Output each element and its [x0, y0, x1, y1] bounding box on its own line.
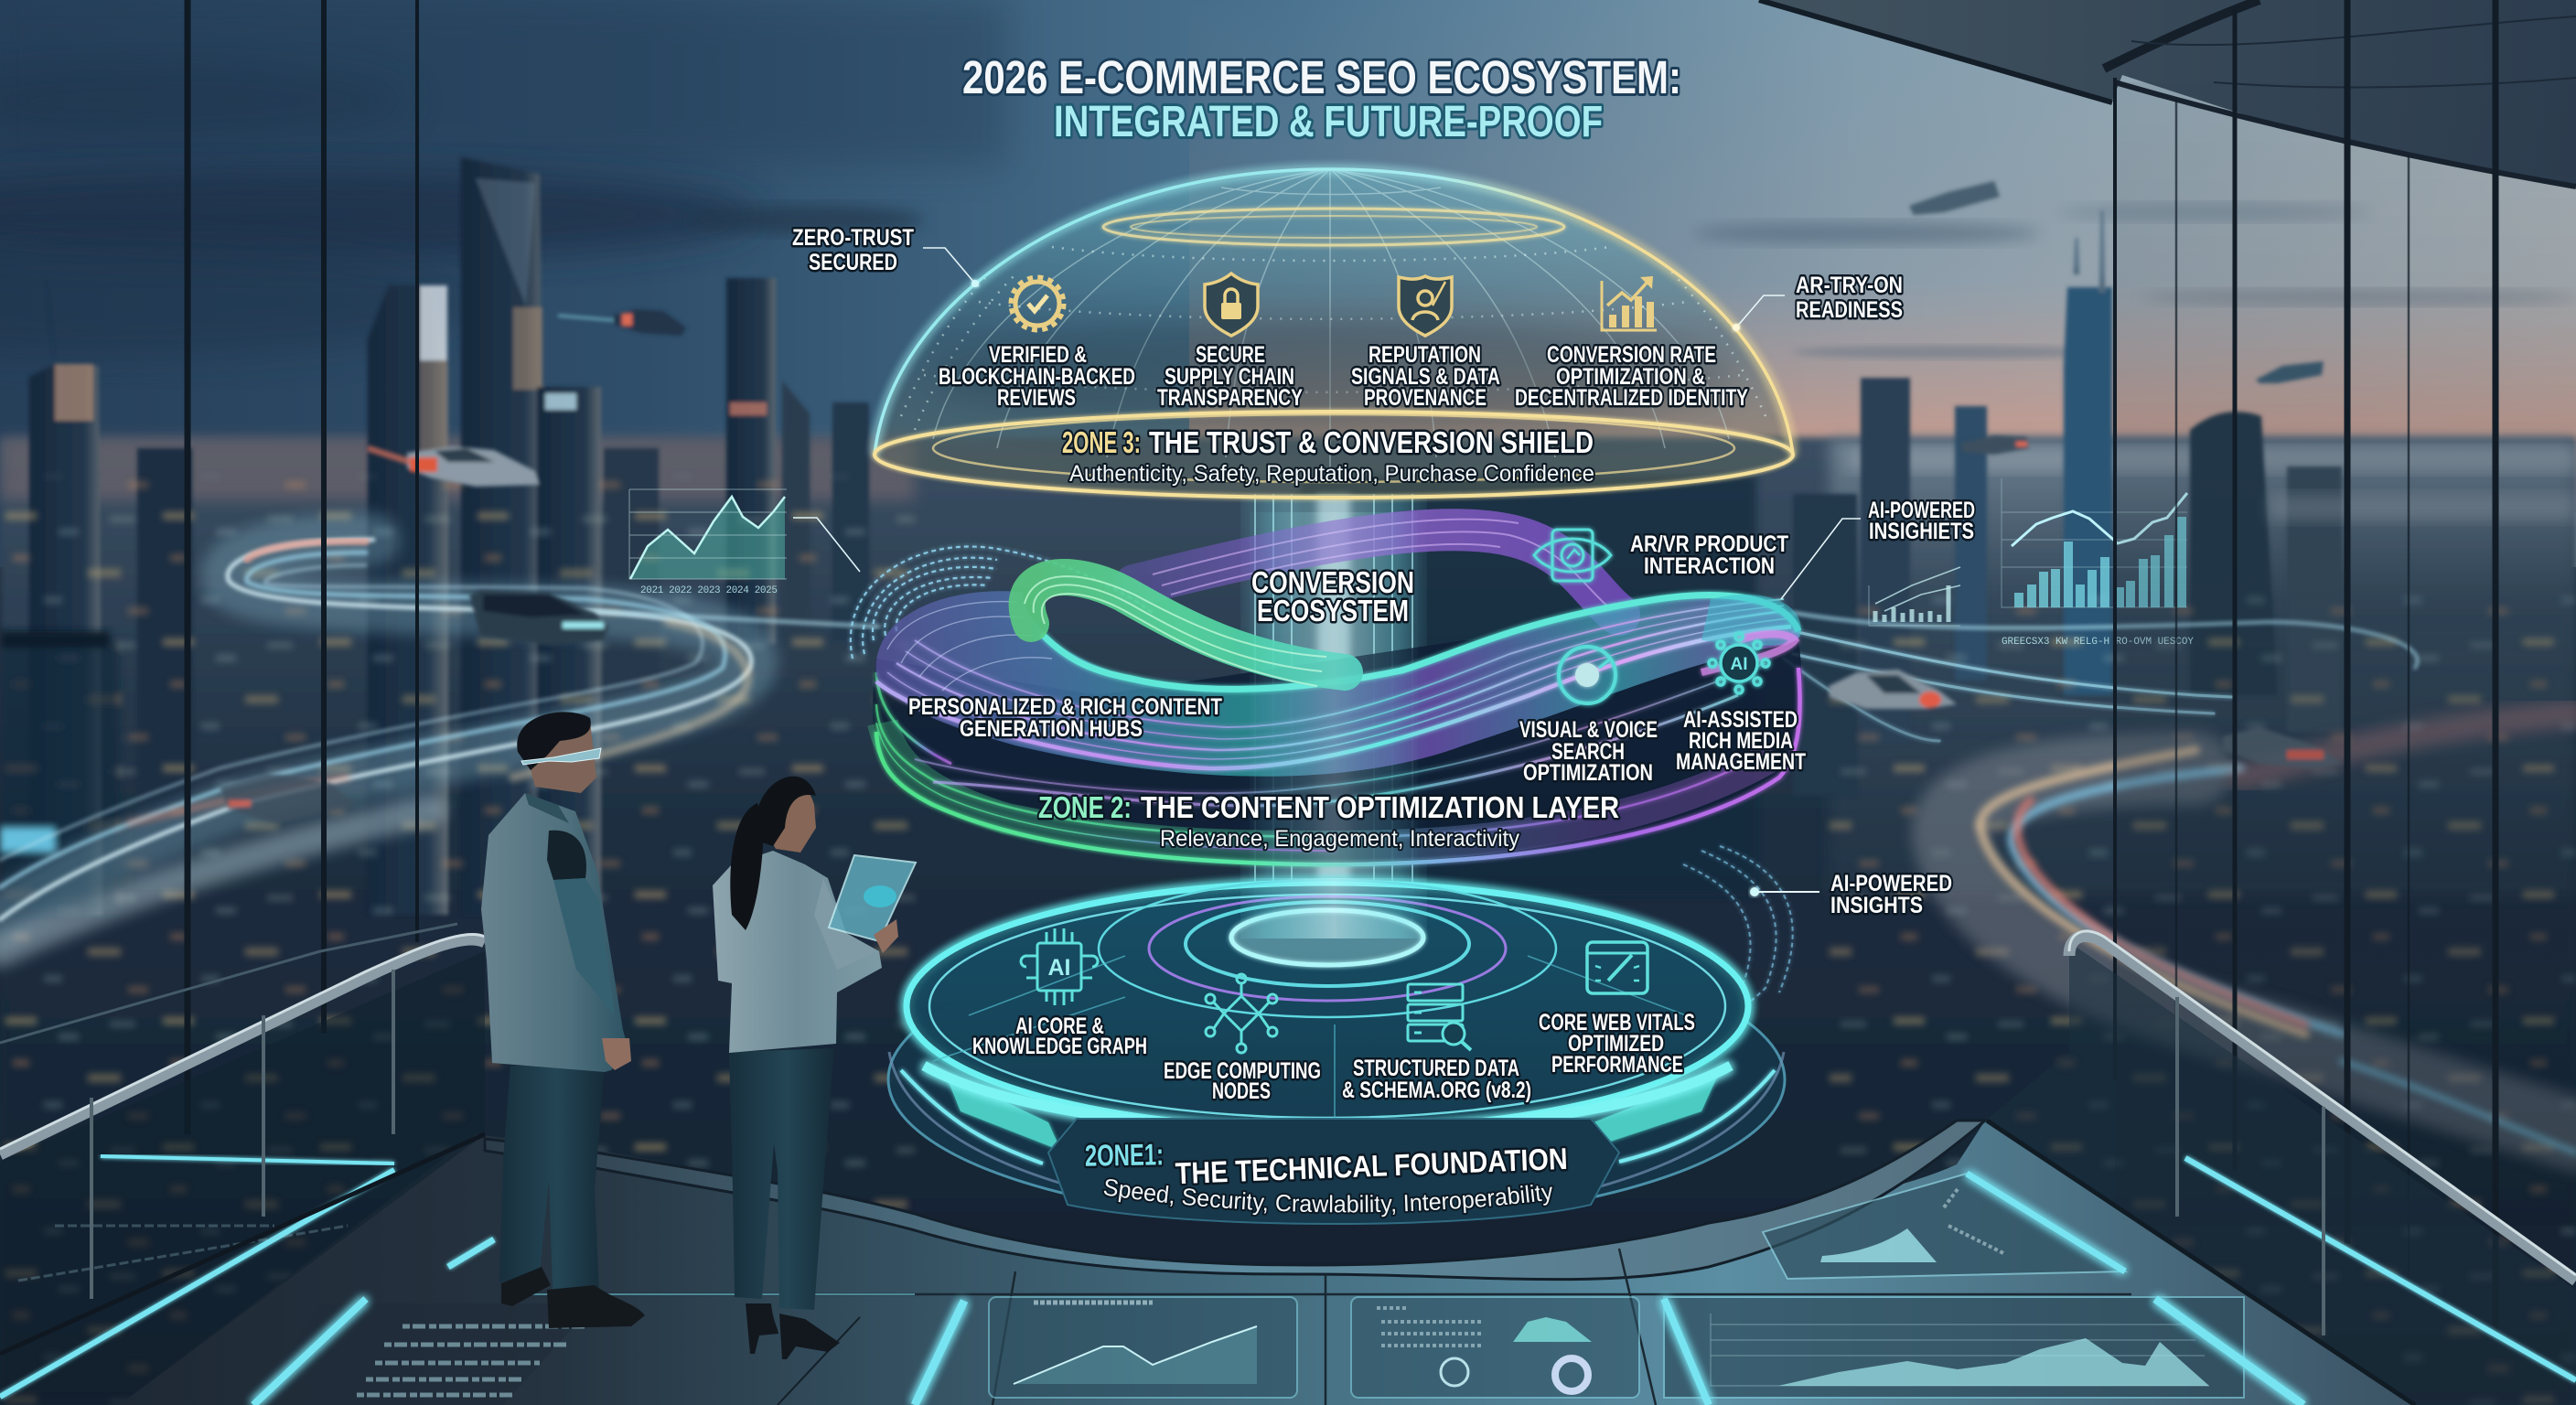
label: AI core: KNOWLEDGE GRAPH	[972, 1034, 1147, 1059]
label: reputation signals: PROVENANCE	[1364, 385, 1487, 411]
label: structured data: & SCHEMA.ORG (v8.2)	[1342, 1078, 1531, 1103]
icon: conversion chart	[1602, 276, 1657, 330]
callout: AI-powered insights: AI-POWERED	[1830, 871, 1952, 896]
icon: reputation shield	[1399, 276, 1452, 336]
label: secure supply chain	[1157, 342, 1303, 411]
floor: curved bezel	[485, 1121, 1985, 1280]
woman: ponytail	[730, 803, 764, 930]
label: reputation signals: SIGNALS & DATA	[1351, 364, 1500, 390]
label: personalized content hubs: PERSONALIZED & RICH CONTENT	[908, 694, 1222, 720]
label: edge computing: NODES	[1212, 1078, 1271, 1104]
woman: jacket	[713, 851, 882, 1053]
label: secure supply chain: SECURE	[1196, 342, 1265, 368]
callout: AI-powered insighiets: INSIGHIETS	[1869, 519, 1974, 544]
label: reputation signals	[1351, 342, 1500, 411]
label: visual and voice search: VISUAL & VOICE	[1519, 717, 1658, 743]
callout: AI-powered insighiets: AI-POWERED	[1868, 498, 1975, 523]
floor	[119, 1121, 2415, 1405]
central light beam	[1240, 494, 1427, 924]
floor: left data panel	[253, 1239, 964, 1405]
label: AR/VR product interaction: INTERACTION	[1644, 553, 1775, 579]
dome grid lines	[933, 169, 1729, 476]
woman: legs	[729, 1048, 834, 1310]
chart: right floating bar and line chart: GREECSX3 KW RELG-H RO-OVM UESCOY	[2002, 637, 2194, 648]
woman: heels	[746, 1303, 840, 1359]
ribbon: right end cap	[1701, 595, 1801, 646]
dome outline glow	[875, 169, 1793, 455]
platform: front bright rim	[924, 1066, 1731, 1132]
label: conversion rate: DECENTRALIZED IDENTITY	[1515, 385, 1748, 411]
zone 2 heading: ZONE 2:	[1038, 790, 1132, 824]
label: AI core: AI CORE &	[1015, 1014, 1104, 1039]
callout: AR try-on readiness: AR-TRY-ON	[1796, 273, 1903, 298]
platform: inner rings	[933, 880, 1686, 1127]
ribbon: back purple band	[1134, 530, 1619, 615]
floor: chart panel 1	[989, 1297, 1297, 1398]
callout: zero-trust secured: SECURED	[809, 250, 897, 275]
woman: head	[761, 785, 816, 853]
ceiling soffit: top right	[1759, 0, 2576, 187]
right dotted spiral	[1674, 846, 1793, 1034]
ribbon: left dotted swirl	[851, 547, 1153, 659]
zone 1: technical foundation platform	[887, 873, 1786, 1225]
dome base ring	[875, 412, 1793, 498]
chart: right floating bar and line chart	[1869, 478, 2194, 648]
label: personalized content hubs: GENERATION HUBS	[960, 716, 1143, 742]
callout: zero-trust secured: ZERO-TRUST	[792, 225, 914, 251]
icon: AI sun gear: AI	[1731, 655, 1747, 674]
zone 2 heading: Relevance, Engagement, Interactivity	[1160, 826, 1519, 852]
tablet	[829, 855, 916, 941]
label: personalized content hubs	[908, 694, 1222, 742]
label: edge computing: EDGE COMPUTING	[1164, 1058, 1321, 1084]
zone 3 heading	[1062, 425, 1594, 487]
background: dusk sky	[0, 0, 2576, 567]
icon: core web vitals gauge	[1587, 942, 1648, 993]
beam front veil	[1250, 512, 1418, 878]
floor: chart panel 2	[1351, 1297, 1639, 1398]
label: core web vitals: CORE WEB VITALS	[1539, 1010, 1695, 1035]
callout: AI-powered insights: INSIGHTS	[1830, 893, 1923, 918]
label: conversion rate	[1515, 342, 1748, 411]
label: visual and voice search: OPTIMIZATION	[1523, 760, 1653, 786]
platform: lower tier	[888, 936, 1785, 1223]
icon: AI chip	[1021, 928, 1098, 1005]
woman: hand	[874, 919, 898, 953]
man: jacket	[481, 793, 629, 1072]
callout: AI-powered insights	[1750, 871, 1952, 918]
zone 2: content optimization ribbon	[851, 512, 1806, 878]
label: AI core	[972, 1014, 1147, 1059]
window frames: right mullions and glass	[2115, 0, 2576, 1335]
callout: AR try-on readiness: READINESS	[1796, 297, 1903, 323]
balustrade: left glass and rail	[0, 924, 485, 1405]
zone 1 subtitle on arc	[1102, 1195, 1555, 1212]
zone 2 heading: THE CONTENT OPTIMIZATION LAYER	[1141, 790, 1619, 824]
callout: AI-powered insighiets	[1781, 498, 1975, 599]
zone 1 title plate	[1048, 1119, 1619, 1224]
zone 3 heading: THE TRUST & CONVERSION SHIELD	[1149, 425, 1594, 459]
platform: glowing segments	[945, 1073, 1061, 1151]
person: man with AR glasses	[481, 712, 645, 1328]
callout: zero-trust secured	[792, 225, 979, 287]
floor: chart panel 3	[1664, 1297, 2303, 1405]
heading: conversion ecosystem: CONVERSION	[1251, 565, 1414, 599]
label: AR/VR product interaction	[1630, 531, 1788, 579]
ribbon: teal upper edge	[1042, 595, 1798, 689]
ribbon: lower band edges	[876, 668, 1800, 864]
label: core web vitals	[1539, 1010, 1695, 1078]
label: structured data	[1342, 1056, 1531, 1103]
icon: verified gear	[1011, 277, 1064, 330]
label: visual and voice search: SEARCH	[1551, 739, 1625, 765]
highway: left light trails	[0, 540, 878, 951]
window frames: left mullions	[188, 0, 417, 1134]
icon: edge computing nodes	[1206, 974, 1277, 1053]
ribbon: left bulge streaks	[887, 602, 1052, 691]
label: verified reviews: VERIFIED &	[989, 342, 1087, 368]
icon: structured data server	[1408, 984, 1471, 1050]
man: shoes	[501, 1267, 645, 1328]
ribbon: lower colour wash	[883, 723, 1775, 846]
icon: AI sun gear	[1709, 633, 1769, 693]
label: secure supply chain: SUPPLY CHAIN	[1165, 364, 1294, 390]
ribbon: green loop	[1027, 577, 1345, 672]
zone 3: dome shield	[875, 169, 1793, 498]
label: core web vitals: OPTIMIZED	[1568, 1031, 1664, 1056]
dome text shade	[928, 318, 1733, 432]
heading: conversion ecosystem: ECOSYSTEM	[1257, 594, 1409, 627]
man: head	[523, 713, 596, 793]
ribbon: main wave sheet	[875, 591, 1799, 777]
label: AI-assisted rich media	[1676, 707, 1806, 775]
zone 1 heading: 2ONE1:	[1085, 1137, 1164, 1173]
ribbon: dark lower band	[873, 640, 1802, 864]
title: 2026 E-COMMERCE SEO ECOSYSTEM:	[962, 51, 1681, 103]
label: AI-assisted rich media: RICH MEDIA	[1689, 728, 1793, 754]
zone 2 heading	[1038, 790, 1619, 852]
man: legs	[499, 1066, 605, 1292]
icon: visual search lens	[1559, 647, 1615, 703]
title: INTEGRATED & FUTURE-PROOF	[1054, 98, 1603, 146]
beam base	[1240, 878, 1427, 938]
title	[962, 51, 1681, 146]
heading: conversion ecosystem	[1251, 565, 1414, 627]
label: edge computing	[1164, 1058, 1321, 1104]
label: conversion rate: CONVERSION RATE	[1547, 342, 1716, 368]
zone 3 heading: Authenticity, Safety, Reputation, Purchase Confidence	[1069, 461, 1594, 487]
platform: top disc	[907, 883, 1748, 1130]
label: secure supply chain: TRANSPARENCY	[1157, 385, 1303, 411]
callout: AR try-on readiness	[1733, 273, 1903, 331]
icon: secure lock shield	[1205, 273, 1258, 336]
zone 1: technical foundation platform: Speed, Security, Crawlability, Interoperability	[1101, 1177, 1554, 1218]
label: verified reviews: BLOCKCHAIN-BACKED	[939, 364, 1135, 390]
dome dotted latitudes	[901, 247, 1766, 430]
label: AR/VR product interaction: AR/VR PRODUCT	[1630, 531, 1788, 557]
label: conversion rate: OPTIMIZATION &	[1556, 364, 1705, 390]
zone 3 heading: 2ONE 3:	[1062, 425, 1141, 459]
dome body	[875, 169, 1793, 498]
balustrade: right glass and rail	[1985, 931, 2576, 1405]
chart: left floating line chart	[629, 489, 860, 596]
label: verified reviews	[939, 342, 1135, 411]
label: reputation signals: REPUTATION	[1368, 342, 1481, 368]
chart: left floating line chart: 2021 2022 2023 2024 2025	[640, 585, 778, 596]
ribbon: wave highlight lines	[876, 599, 1791, 806]
label: verified reviews: REVIEWS	[997, 385, 1076, 411]
zone 1 heading: THE TECHNICAL FOUNDATION	[1175, 1142, 1568, 1190]
label: AI-assisted rich media: AI-ASSISTED	[1683, 707, 1798, 733]
icon: AI chip: AI	[1048, 955, 1070, 981]
label: AI-assisted rich media: MANAGEMENT	[1676, 749, 1806, 775]
label: core web vitals: PERFORMANCE	[1551, 1052, 1683, 1078]
icon: AR/VR phone and eye	[1534, 530, 1611, 581]
person: woman with tablet	[713, 777, 916, 1359]
dome top ring	[1103, 209, 1564, 245]
floor: chart panel 4	[1763, 1174, 2125, 1279]
label: visual and voice search	[1519, 717, 1658, 786]
label: structured data: STRUCTURED DATA	[1353, 1056, 1519, 1081]
highway: right light trails	[1784, 613, 2576, 1153]
man: AR visor	[521, 748, 601, 765]
flying vehicles	[220, 181, 2344, 823]
